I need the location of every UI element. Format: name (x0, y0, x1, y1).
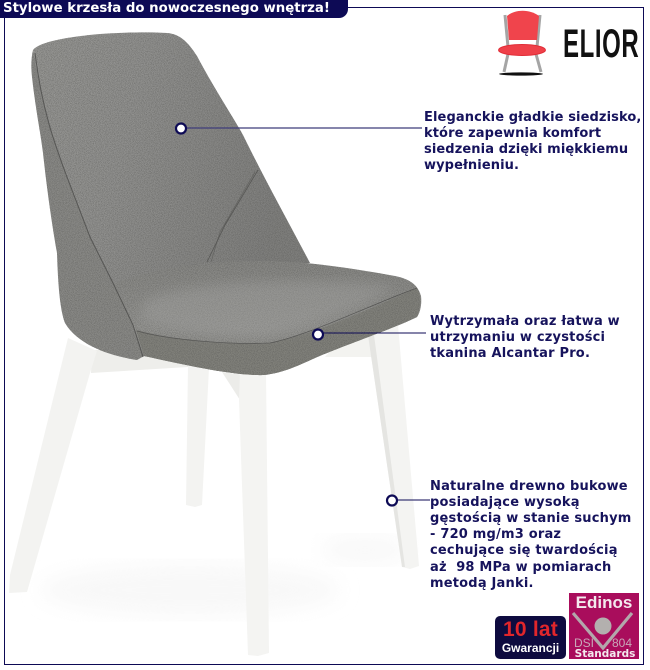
marker and leader line (312, 328, 426, 341)
logo: Elior (498, 10, 639, 76)
callout text: Wytrzymała oraz łatwa w utrzymaniu w czystości tkanina Alcantar Pro. (430, 314, 620, 361)
badge: Edinos standards: 804 (612, 636, 632, 650)
backrest side shell (31, 50, 144, 360)
seat (100, 261, 421, 375)
seat front band (136, 288, 420, 375)
front leg (239, 372, 269, 656)
badge: Edinos standards (569, 593, 639, 659)
seam lines (35, 53, 417, 357)
callout text: Naturalne drewno bukowe posiadające wysoką gęstością w stanie suchym - 720 mg/m3 oraz cechujące się twardością aż 98 MPa w pomiarach metodą Janki. (430, 478, 632, 591)
callout text: Eleganckie gładkie siedzisko, które zapewnia komfort siedzenia dzięki miękkiemu wypełnieniu. (424, 110, 641, 173)
left leg (9, 338, 97, 593)
right leg (368, 325, 419, 569)
badge: 10 year warranty (495, 616, 566, 659)
callout: seat back (174, 110, 641, 173)
rail (91, 350, 190, 373)
badge: 10 year warranty: 10 lat (503, 618, 558, 641)
marker and leader line (386, 494, 430, 507)
badge: 10 year warranty: Gwarancji (502, 641, 559, 655)
seat top highlight (140, 281, 395, 338)
icon: red chair (498, 10, 546, 76)
floor shadow (40, 536, 410, 616)
title banner: Stylowe krzesła do nowoczesnego wnętrza! (3, 1, 330, 16)
chair legs (9, 325, 419, 656)
badge: Edinos standards: Edinos (576, 593, 632, 612)
callout: wood (386, 478, 632, 591)
badge: Edinos standards: DSI (574, 636, 594, 650)
callout: fabric (312, 314, 620, 361)
marker and leader line (174, 122, 422, 135)
backrest (33, 32, 310, 300)
brand name: ELIOR (563, 22, 639, 66)
back left leg (186, 365, 209, 507)
